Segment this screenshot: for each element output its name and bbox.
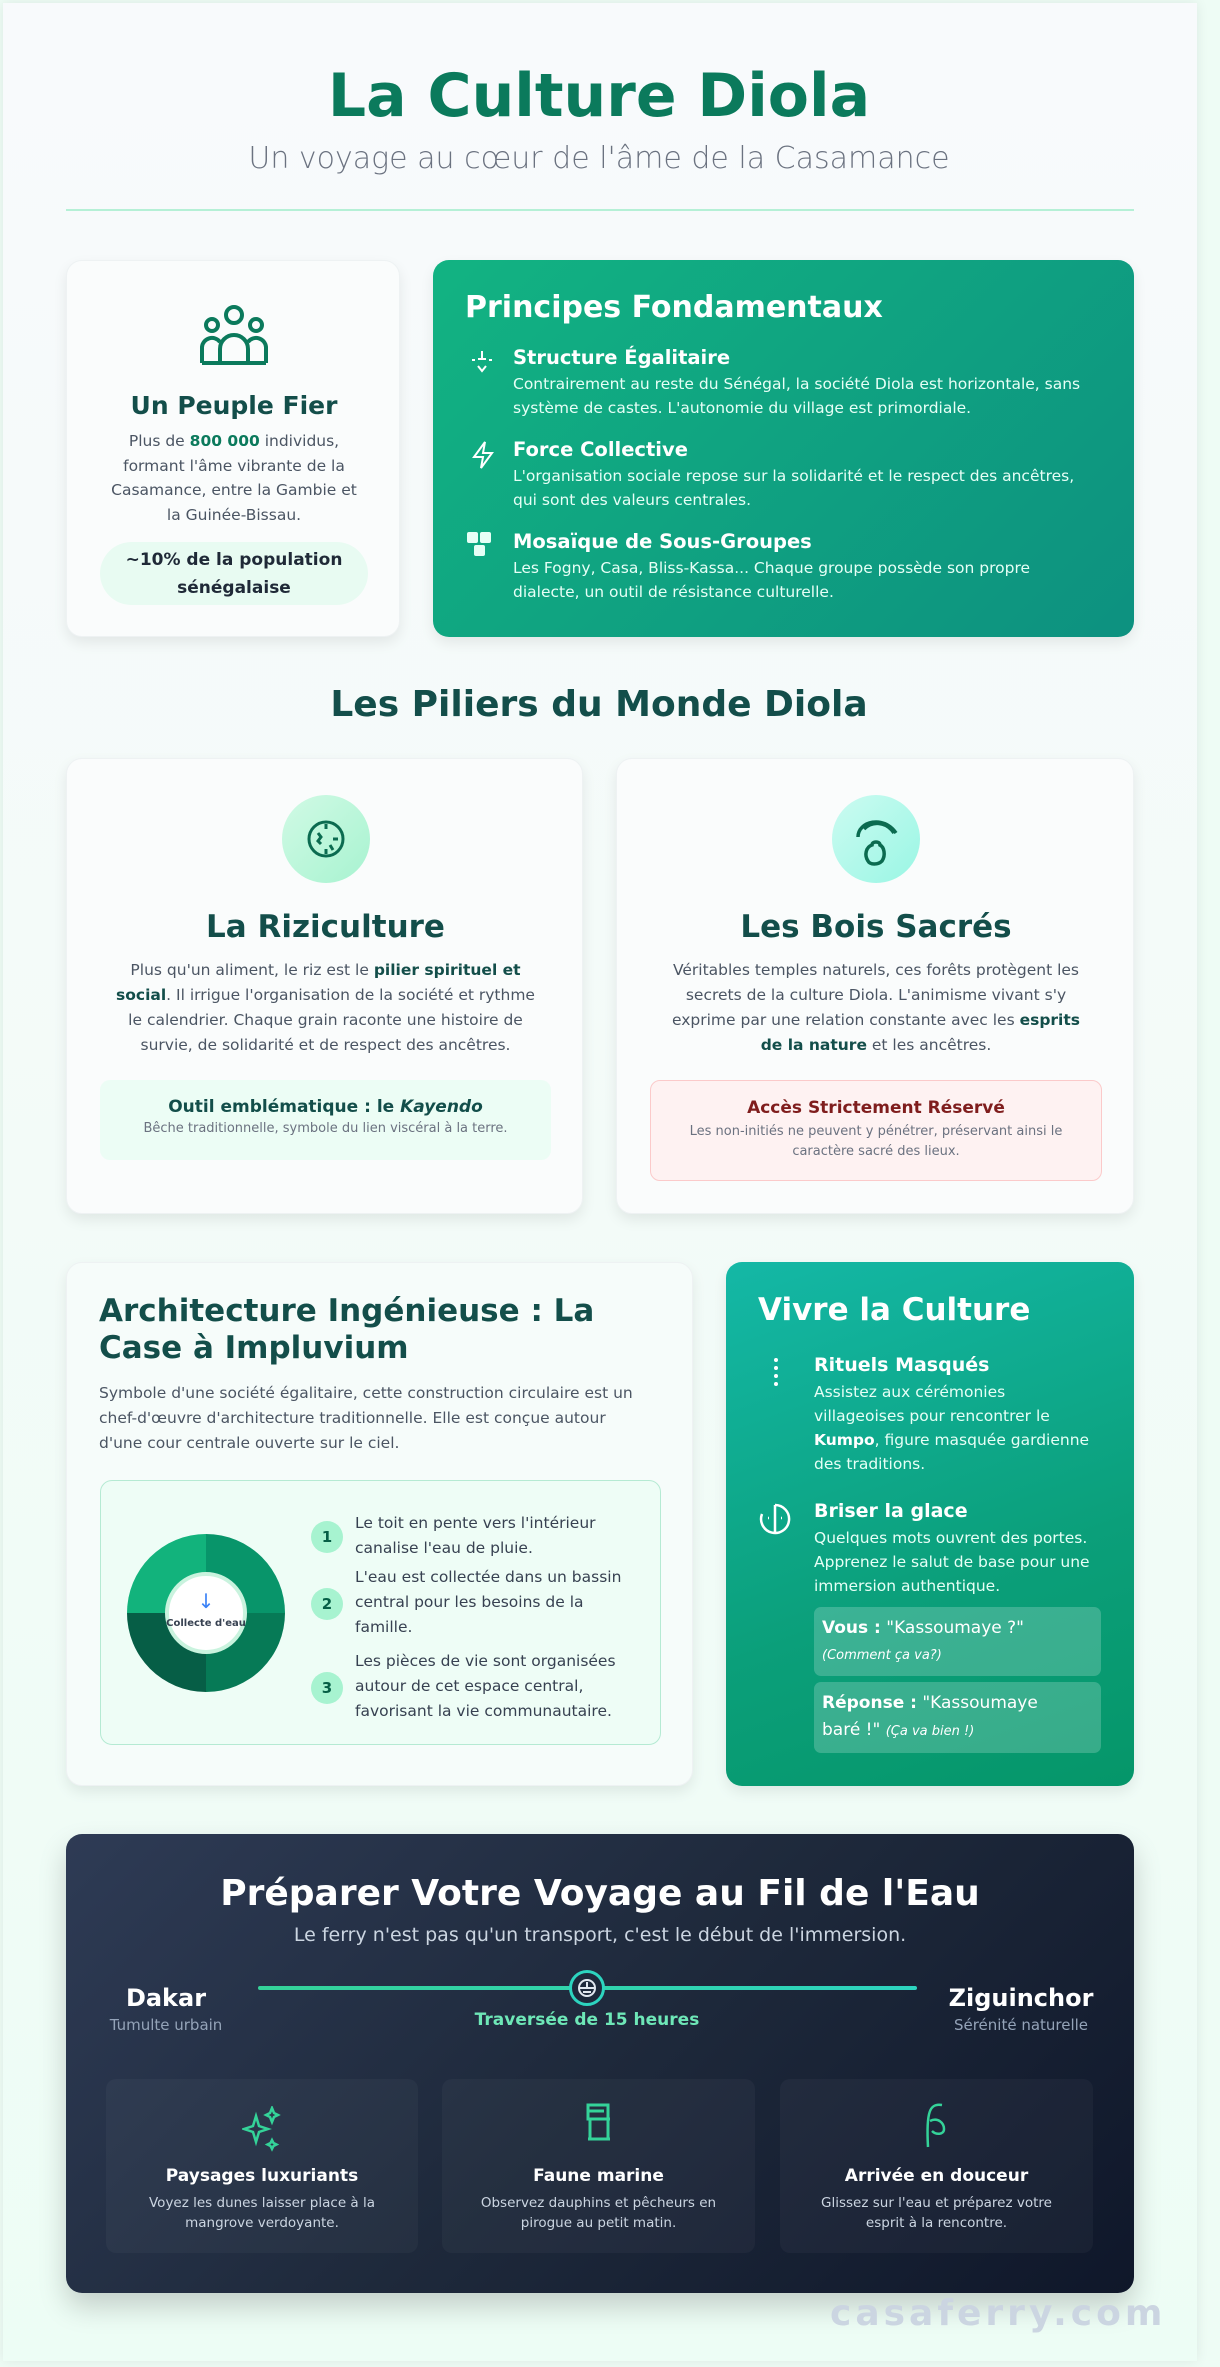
icon: mask [832,795,920,883]
timeline [110,1970,1094,2034]
panel: préparer votre voyage [66,1834,1134,2293]
donut chart: ↓ [198,1589,214,1613]
heading: Architecture Ingénieuse : La Case à Impluvium [99,1293,594,1366]
card: paysages: Paysages luxuriants [166,2166,358,2186]
diagram box: Le toit en pente vers l'intérieur canalise l'eau de pluie. [355,1514,596,1557]
item: mosaique [467,530,1030,601]
card: faune marine: Faune marine [533,2166,664,2186]
card: paysages: Voyez les dunes laisser place à la mangrove verdoyante. [149,2195,375,2231]
label: traversée: Traversée de 15 heures [475,2010,699,2030]
step 3 [311,1652,616,1720]
callout: accès réservé [650,1080,1102,1181]
destination: ziguinchor: Ziguinchor [949,1984,1093,2012]
callout: kayendo: Outil emblématique : le Kayendo [168,1097,483,1117]
dialogue: vous [814,1607,1101,1676]
pill: population [100,542,368,605]
panel: vivre la culture: Briser la glace [814,1500,968,1522]
callout: kayendo [100,1080,551,1160]
diagram box: 1 [322,1528,332,1546]
donut chart: Collecte d'eau [166,1618,246,1629]
panel: vivre la culture: Rituels Masqués [814,1354,989,1376]
panel: riziculture [66,758,583,1214]
item: force collective [472,438,1074,509]
origin: dakar: Tumulte urbain [110,2016,222,2034]
donut chart [127,1534,285,1692]
origin: dakar [110,1984,222,2034]
panel: principes fondamentaux [433,260,1134,637]
destination: ziguinchor [949,1984,1094,2034]
subtitle: Un voyage au cœur de l'âme de la Casamance [248,141,950,176]
text: Véritables temples naturels, ces forêts protègent les secrets de la culture Diola. L'animisme vivant s'y exprime par une relation constante avec les esprits de la nature et les ancêtres. [672,961,1080,1054]
diagram box: Les pièces de vie sont organisées autour de cet espace central, favorisant la vie communautaire. [355,1652,616,1720]
diagram box [100,1480,661,1745]
text: Plus de 800 000 individus, formant l'âme vibrante de la Casamance, entre la Gambie et la Guinée-Bissau. [111,432,357,524]
callout: kayendo: Bêche traditionnelle, symbole du lien viscéral à la terre. [143,1121,508,1136]
panel: un peuple fier [66,260,400,637]
icon: ferry [569,1970,605,2006]
panel: bois sacrés [616,758,1134,1214]
subtitle: Le ferry n'est pas qu'un transport, c'est le début de l'immersion. [294,1924,906,1946]
card: paysages [106,2079,418,2253]
panel: vivre la culture: Quelques mots ouvrent des portes. Apprenez le salut de base pour une immersion authentique. [814,1529,1090,1595]
card: faune marine [442,2079,755,2253]
heading: Préparer Votre Voyage au Fil de l'Eau [220,1873,980,1914]
item: rituels [774,1354,1089,1473]
dialogue: réponse: Réponse : "Kassoumaye baré !" (Ça va bien !) [822,1693,1038,1740]
dialogue: vous: Vous : "Kassoumaye ?" [822,1618,1024,1638]
heading: Un Peuple Fier [131,391,337,420]
heading: Vivre la Culture [758,1292,1030,1328]
panel: principes fondamentaux: Les Fogny, Casa, Bliss-Kassa... Chaque groupe possède son propre dialecte, un outil de résistance culturelle. [513,559,1030,601]
destination: ziguinchor: Sérénité naturelle [954,2016,1088,2034]
origin: dakar: Dakar [126,1984,206,2012]
step 1 [311,1514,596,1557]
panel: vivre la culture: Assistez aux cérémonies [814,1383,1005,1401]
panel: principes fondamentaux: L'organisation sociale repose sur la solidarité et le respect des ancêtres, qui sont des valeurs centrales. [513,467,1074,509]
diagram box: 2 [322,1595,332,1613]
text: Plus qu'un aliment, le riz est le pilier spirituel et social. Il irrigue l'organisation de la société et rythme le calendrier. Chaque grain raconte une histoire de survie, de solidarité et de respect des ancêtres. [116,961,535,1054]
heading: Principes Fondamentaux [465,290,883,325]
callout: accès réservé: Accès Strictement Réservé [747,1098,1005,1118]
dialogue: réponse [814,1682,1101,1753]
step 2 [311,1568,621,1636]
heading: La Riziculture [206,909,445,945]
card: arrivée [780,2079,1093,2253]
icon: people [200,305,268,365]
item: briser la glace [760,1500,1090,1595]
panel: vivre la culture: villageoises pour rencontrer le Kumpo, figure masquée gardienne des traditions. [814,1407,1089,1473]
heading: Les Bois Sacrés [740,909,1012,945]
diagram box: 3 [322,1679,332,1697]
icon: rice [282,795,370,883]
card: arrivée: Arrivée en douceur [845,2166,1028,2186]
pill: population: ~10% de la population sénégalaise [126,550,342,598]
callout: accès réservé: Les non-initiés ne peuvent y pénétrer, préservant ainsi le caractère sacré des lieux. [690,1124,1062,1159]
text: Symbole d'une société égalitaire, cette construction circulaire est un chef-d'œuvre d'architecture traditionnelle. Elle est conçue autour d'une cour centrale ouverte sur le ciel. [99,1384,633,1452]
panel: principes fondamentaux: Structure Égalitaire [513,346,730,369]
panel: principes fondamentaux: Contrairement au reste du Sénégal, la société Diola est horizontale, sans système de castes. L'autonomie du village est primordiale. [513,375,1080,417]
card: faune marine: Observez dauphins et pêcheurs en pirogue au petit matin. [481,2195,716,2231]
panel: vivre la culture [726,1262,1134,1786]
section heading: piliers: Les Piliers du Monde Diola [330,684,868,725]
item: structure [472,346,1080,417]
dialogue: vous: (Comment ça va?) [822,1648,942,1663]
diagram box: L'eau est collectée dans un bassin central pour les besoins de la famille. [355,1568,621,1636]
card: arrivée: Glissez sur l'eau et préparez votre esprit à la rencontre. [821,2195,1052,2231]
footer: brand: casaferry.com [830,2293,1166,2334]
panel: architecture [66,1262,693,1786]
panel: principes fondamentaux: Force Collective [513,438,688,461]
panel: principes fondamentaux: Mosaïque de Sous-Groupes [513,530,812,553]
title: La Culture Diola [328,61,870,131]
